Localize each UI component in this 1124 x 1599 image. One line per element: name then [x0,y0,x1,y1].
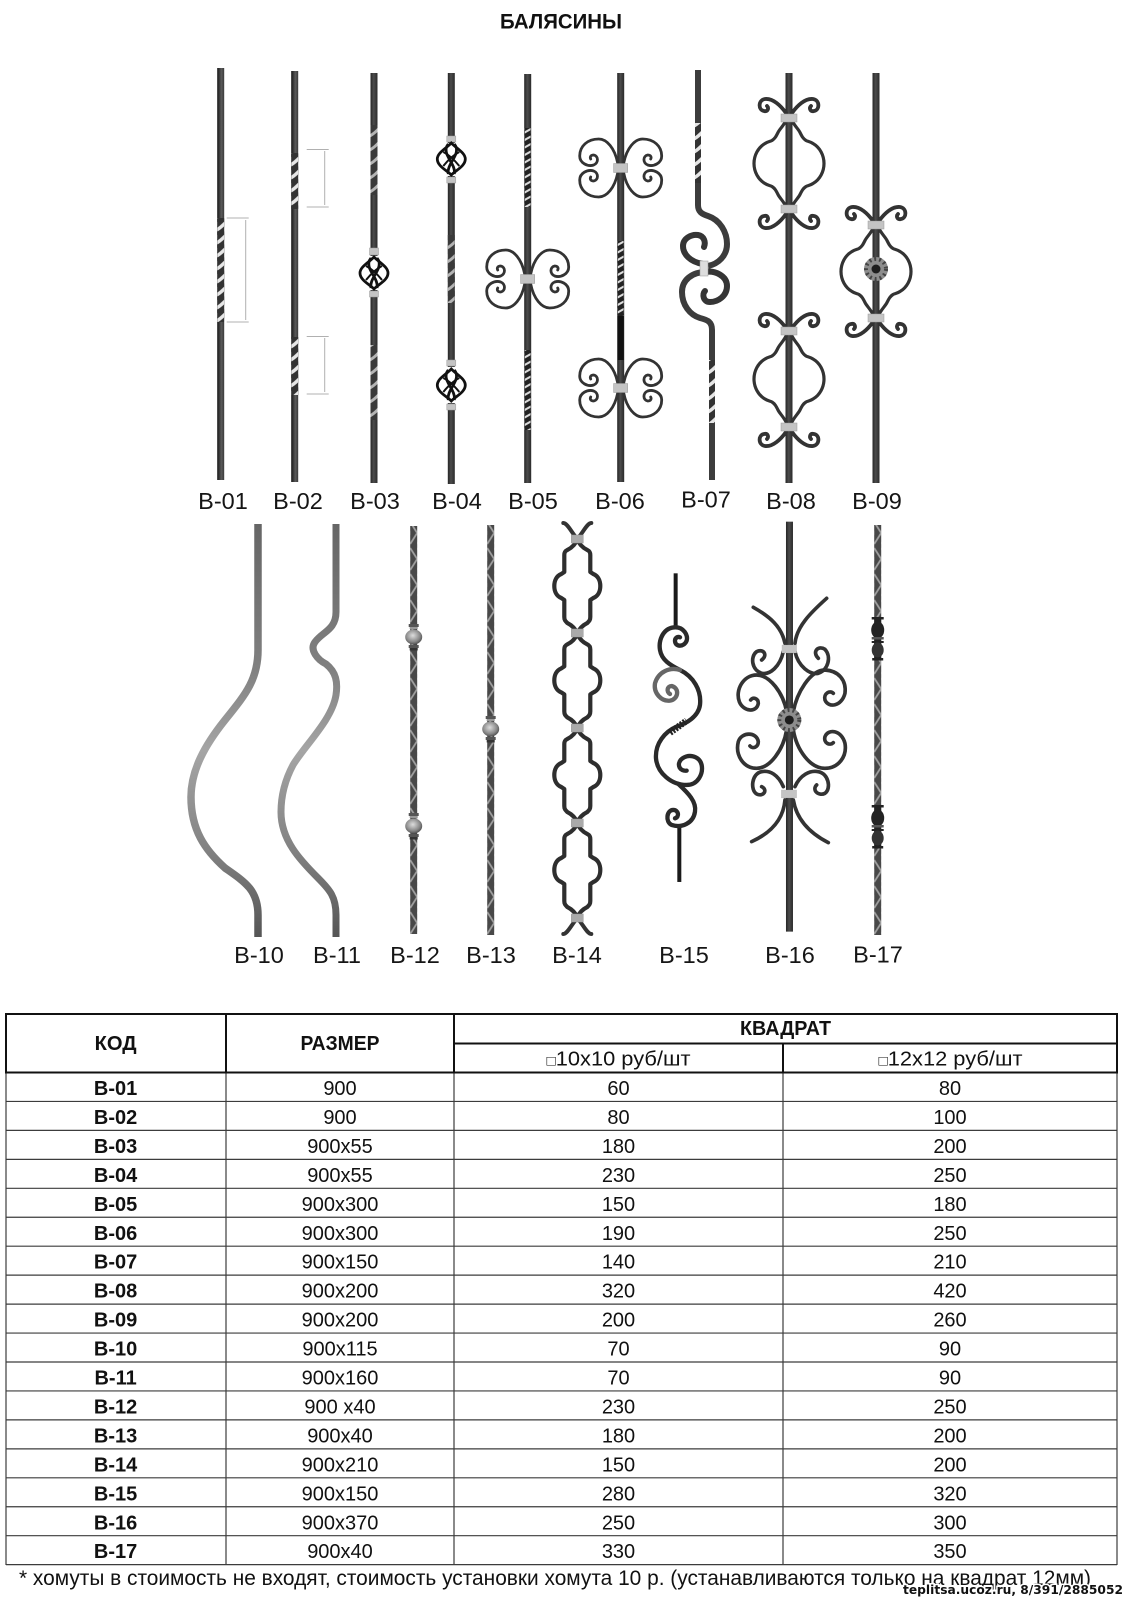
row B-02 [94,1107,967,1129]
row B-14: 200 [933,1454,967,1476]
row B-14: В-14 [94,1454,138,1476]
row B-02: 900 [323,1107,357,1129]
row B-11: 900x160 [302,1368,378,1390]
row B-15 [94,1483,967,1505]
row B-01: 80 [939,1078,961,1100]
row B-05 [94,1194,967,1216]
row B-12: 230 [602,1396,635,1418]
row B-07: 140 [602,1252,635,1274]
row B-06: 190 [602,1223,635,1245]
row B-10: 90 [939,1339,961,1361]
labels row 2 [234,942,903,968]
title: БАЛЯСИНЫ [500,10,622,34]
row B-04: 900x55 [307,1165,373,1187]
labels row 2: В-15 [659,942,709,968]
row B-10: 70 [607,1339,630,1361]
row B-07: В-07 [94,1252,137,1274]
baluster B-10 [191,524,258,937]
row B-15: 900x150 [302,1483,378,1505]
row B-12 [94,1396,967,1418]
footnote: * хомуты в стоимость не входят, стоимость установки хомута 10 р. (устанавливаются только на квадрат 12мм) [19,1567,1091,1590]
row B-01: 900 [323,1078,357,1100]
row B-08: В-08 [94,1281,137,1303]
baluster B-02 [291,71,329,482]
labels row 2: В-14 [552,942,602,968]
row B-12: В-12 [94,1396,137,1418]
row B-07: 210 [933,1252,967,1274]
row B-03 [94,1136,967,1158]
row B-08 [94,1281,967,1303]
row B-14: 150 [602,1454,635,1476]
baluster B-08 [754,73,824,483]
price table [6,1013,1117,1565]
baluster B-03 [360,73,388,483]
row B-05: В-05 [94,1194,137,1216]
row B-02: В-02 [94,1107,137,1129]
row B-02: 100 [933,1107,967,1129]
row B-13: 900x40 [307,1425,373,1447]
row B-17 [94,1541,967,1563]
row B-07 [94,1252,967,1274]
table header: РАЗМЕР [300,1033,380,1055]
row B-17: В-17 [94,1541,137,1563]
watermark: teplitsa.ucoz.ru, 8/391/2885052 [903,1582,1123,1597]
row B-05: 150 [602,1194,635,1216]
labels row 1: В-09 [852,488,902,514]
row B-10 [94,1339,961,1361]
row B-13 [94,1425,967,1447]
row B-17: 330 [602,1541,635,1563]
baluster B-01 [217,68,249,480]
baluster B-06 [580,73,662,482]
row B-11: 70 [607,1368,630,1390]
row B-16: В-16 [94,1512,137,1534]
labels row 2: В-12 [390,942,440,968]
labels row 1: В-08 [766,488,816,514]
row B-16: 250 [602,1512,635,1534]
baluster B-04 [437,73,465,484]
row B-15: В-15 [94,1483,137,1505]
baluster B-14 [554,523,600,934]
row B-17: 350 [933,1541,967,1563]
row B-05: 900x300 [302,1194,378,1216]
row B-12: 900 x40 [304,1396,376,1418]
labels row 1: В-03 [350,488,400,514]
baluster B-13 [482,525,499,935]
table header: □12x12 руб/шт [878,1048,1022,1070]
row B-06: 900x300 [302,1223,378,1245]
row B-11: В-11 [94,1368,137,1390]
labels row 2: В-10 [234,942,284,968]
baluster B-17 [871,525,884,935]
row B-14: 900x210 [302,1454,378,1476]
row B-09: 200 [602,1310,635,1332]
row B-09: 260 [933,1310,967,1332]
row B-09: В-09 [94,1310,137,1332]
row B-11: 90 [939,1368,961,1390]
row B-15: 280 [602,1483,635,1505]
baluster B-07 [682,70,727,480]
labels row 1: В-01 [198,488,248,514]
row B-08: 320 [602,1281,635,1303]
row B-17: 900x40 [307,1541,373,1563]
row B-13: 180 [602,1425,635,1447]
labels row 1 [198,486,902,514]
labels row 1: В-04 [432,488,482,514]
baluster B-16 [738,522,845,932]
row B-06: В-06 [94,1223,137,1245]
row B-03: 900x55 [307,1136,373,1158]
row B-04: 230 [602,1165,635,1187]
baluster B-12 [405,526,422,934]
baluster B-11 [281,524,337,937]
row B-14 [94,1454,967,1476]
table header: □10x10 руб/шт [546,1048,690,1070]
row B-15: 320 [933,1483,967,1505]
row B-09 [94,1310,967,1332]
row B-03: В-03 [94,1136,137,1158]
labels row 2: В-13 [466,942,516,968]
row B-10: 900x115 [302,1339,378,1361]
row B-06 [94,1223,967,1245]
row B-01: 60 [607,1078,630,1100]
row B-10: В-10 [94,1339,137,1361]
row B-01: В-01 [94,1078,137,1100]
row B-01 [94,1078,961,1100]
baluster B-05 [487,74,569,483]
row B-03: 200 [933,1136,967,1158]
row B-11 [94,1368,961,1390]
row B-16 [94,1512,967,1534]
table header [95,1018,1023,1070]
row B-08: 420 [933,1281,967,1303]
row B-13: В-13 [94,1425,137,1447]
row B-07: 900x150 [302,1252,378,1274]
row B-12: 250 [933,1396,967,1418]
row B-04: В-04 [94,1165,138,1187]
row B-16: 300 [933,1512,967,1534]
baluster B-15 [655,573,702,882]
row B-16: 900x370 [302,1512,378,1534]
row B-13: 200 [933,1425,967,1447]
row B-05: 180 [933,1194,967,1216]
row B-02: 80 [607,1107,630,1129]
row B-06: 250 [933,1223,967,1245]
labels row 2: В-16 [765,942,815,968]
row B-04: 250 [933,1165,967,1187]
labels row 1: В-05 [508,488,558,514]
row B-03: 180 [602,1136,635,1158]
row B-08: 900x200 [302,1281,378,1303]
labels row 2: В-17 [853,942,903,968]
baluster B-09 [841,73,911,483]
table header: КВАДРАТ [740,1018,831,1040]
table header: КОД [95,1033,137,1055]
labels row 1: В-07 [681,486,731,512]
row B-09: 900x200 [302,1310,378,1332]
labels row 1: В-06 [595,488,645,514]
labels row 2: В-11 [313,942,361,968]
row B-04 [94,1165,967,1187]
labels row 1: В-02 [273,488,323,514]
